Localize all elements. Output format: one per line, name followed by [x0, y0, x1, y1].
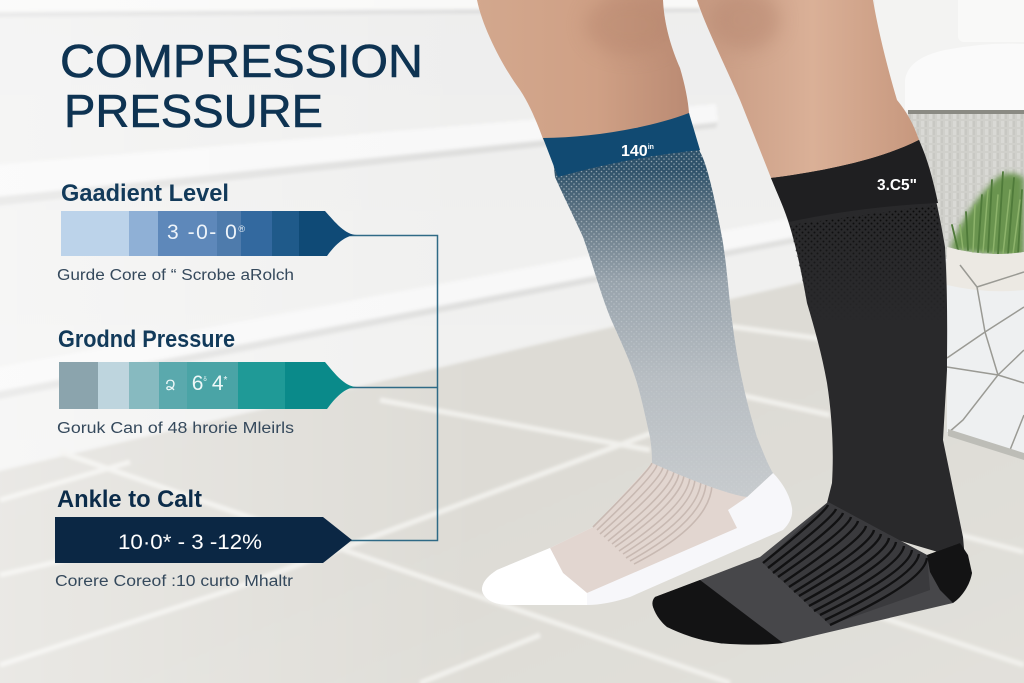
title second line: PRESSURE	[64, 85, 323, 137]
bar value: 3 -0- 0	[167, 221, 237, 244]
teal bar	[59, 362, 359, 409]
bar value: ®	[238, 224, 245, 234]
panel: ankle to calf	[55, 486, 352, 590]
left leg	[477, 0, 690, 142]
connector lines	[345, 236, 438, 540]
cuff	[543, 113, 700, 177]
left sock: grey gradient compression	[482, 113, 792, 605]
bar value: 4	[212, 372, 224, 395]
title: COMPRESSION	[60, 35, 423, 87]
panel: gradient level	[57, 180, 359, 284]
bar value: Ձ 6	[165, 372, 203, 395]
plant in white pot	[947, 172, 1024, 460]
navy bar	[55, 517, 352, 563]
cuff label: 3.C5"	[877, 177, 917, 194]
cuff label: 140	[621, 143, 648, 160]
foot ribs	[763, 502, 930, 625]
caption: Gurde Core of “ Scrobe aRolch	[57, 267, 294, 284]
right leg	[697, 0, 930, 178]
bar value: 10·0* - 3 -12%	[118, 531, 262, 554]
right sock: black	[652, 140, 972, 645]
cuff band	[771, 140, 938, 222]
black toe	[652, 580, 783, 645]
heading: Gaadient Level	[61, 180, 229, 207]
panel: ground pressure	[57, 326, 359, 437]
cuff label: in	[648, 144, 654, 151]
black heel	[927, 543, 972, 603]
caption: Corere Coreof :10 curto Mhaltr	[55, 573, 293, 590]
heading: Grodnd Pressure	[58, 326, 235, 353]
background: sofa and basket	[875, 0, 1024, 259]
caption: Goruk Can of 48 hrorie Mleirls	[57, 420, 294, 437]
sock foot	[653, 502, 972, 643]
bar value: *	[224, 375, 228, 386]
sock leg	[771, 140, 965, 560]
foot ribs	[593, 463, 712, 564]
sock leg	[554, 150, 773, 497]
bar value: ᵟ	[203, 375, 207, 385]
gradient bar	[61, 211, 359, 256]
heading: Ankle to Calt	[57, 486, 202, 513]
sock foot	[482, 463, 792, 605]
left-side light wash behind the panels	[0, 0, 480, 683]
white toe	[482, 548, 587, 605]
